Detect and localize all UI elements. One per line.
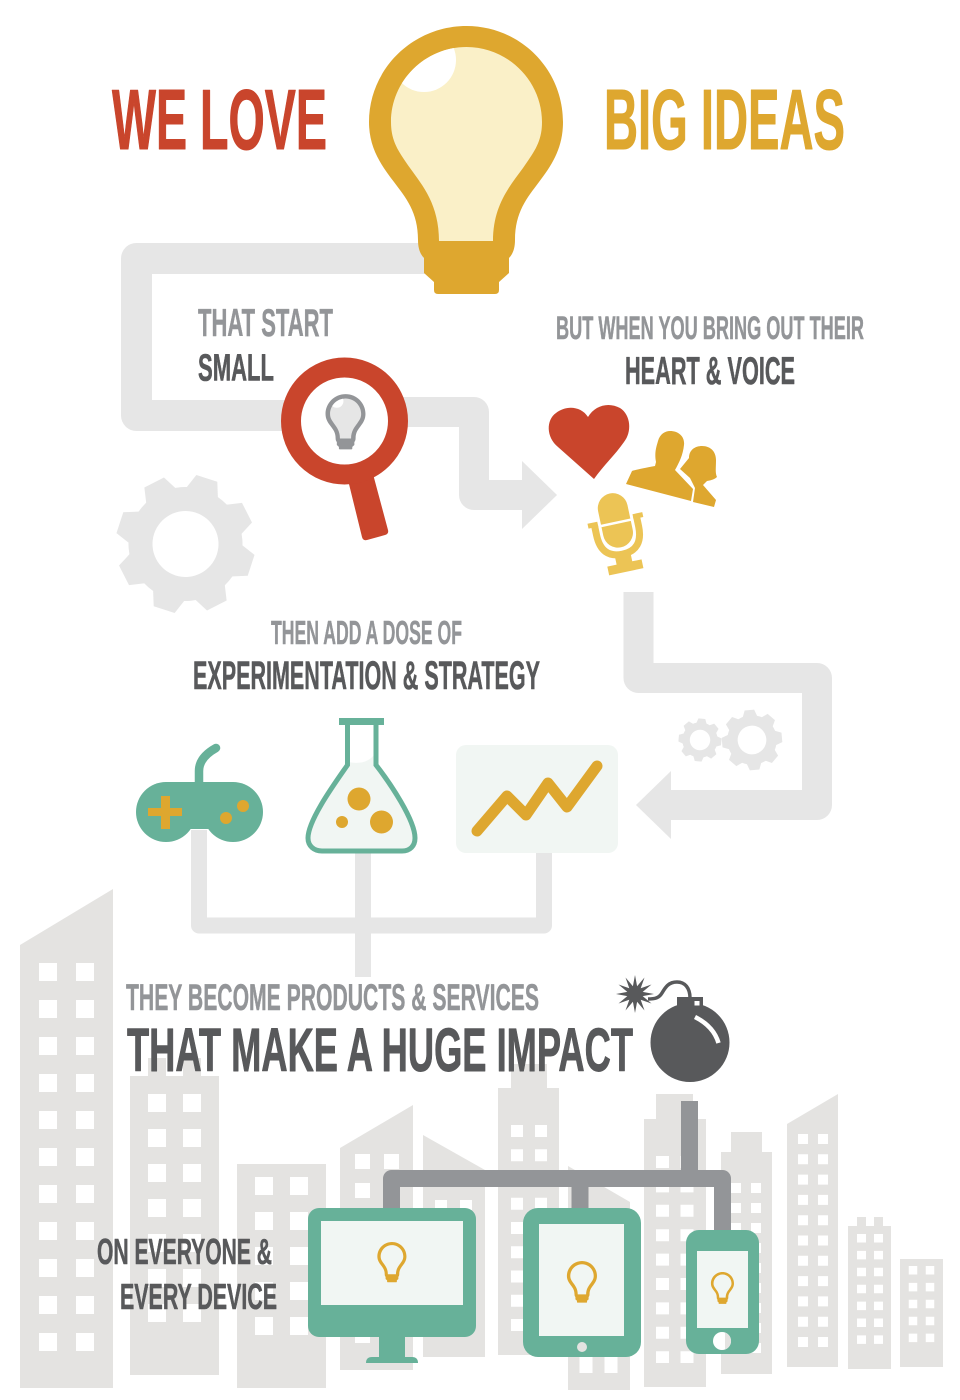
building 11 xyxy=(848,1217,891,1369)
text: on everyone and: ON EVERYONE & xyxy=(97,1231,272,1272)
text: that make a huge impact: THAT MAKE A HUGE IMPACT xyxy=(127,1016,633,1084)
text: small: SMALL xyxy=(198,348,274,390)
building 5 xyxy=(423,1135,485,1357)
icon: microphone xyxy=(582,488,654,578)
icon: main light bulb xyxy=(369,26,563,294)
building 8 xyxy=(644,1094,706,1387)
small gear pair xyxy=(677,707,785,773)
building 6 xyxy=(498,1064,559,1355)
building 3 xyxy=(237,1164,326,1388)
flow arrow: from heart and voice to experimentation xyxy=(636,592,817,839)
text: they become products and services: THEY BECOME PRODUCTS & SERVICES xyxy=(126,977,539,1018)
building 9 xyxy=(721,1132,772,1374)
flow path: from bulb to magnifier xyxy=(136,258,430,416)
building 7 xyxy=(568,1166,630,1390)
icon: small grey bulb xyxy=(326,394,365,449)
building 2 xyxy=(130,1058,219,1375)
chart: rising line panel xyxy=(456,745,618,853)
icon: magnifier with small bulb xyxy=(291,368,398,540)
text: every device: EVERY DEVICE xyxy=(120,1276,277,1317)
icon: heart xyxy=(549,405,629,479)
city skyline background xyxy=(20,889,943,1390)
text: then add a dose of: THEN ADD A DOSE OF xyxy=(271,614,462,651)
icon: tablet xyxy=(523,1208,641,1357)
icon: desktop monitor xyxy=(308,1208,476,1363)
icon: people xyxy=(626,431,717,507)
icon: bomb xyxy=(616,975,730,1082)
large gear xyxy=(93,451,278,637)
building 1 xyxy=(20,889,113,1388)
building 12 xyxy=(900,1259,943,1367)
building 10 xyxy=(787,1094,838,1367)
flow arrow: from magnifier to heart and voice xyxy=(400,412,557,529)
icon: lab flask xyxy=(308,718,415,851)
flow connectors: from experiments to products xyxy=(199,830,544,977)
text: heart and voice: HEART & VOICE xyxy=(625,350,795,393)
title: we love: WE LOVE xyxy=(112,73,327,168)
text: that start: THAT START xyxy=(198,302,333,345)
icon: smartphone xyxy=(686,1230,759,1354)
icon: game controller xyxy=(136,748,263,842)
icon: phone bulb xyxy=(711,1272,734,1304)
icon: monitor bulb xyxy=(377,1242,406,1282)
building 4 xyxy=(340,1105,413,1370)
connector: products to devices xyxy=(392,1101,722,1234)
text: experimentation and strategy: EXPERIMENTATION & STRATEGY xyxy=(193,654,540,698)
icon: tablet bulb xyxy=(567,1261,597,1303)
